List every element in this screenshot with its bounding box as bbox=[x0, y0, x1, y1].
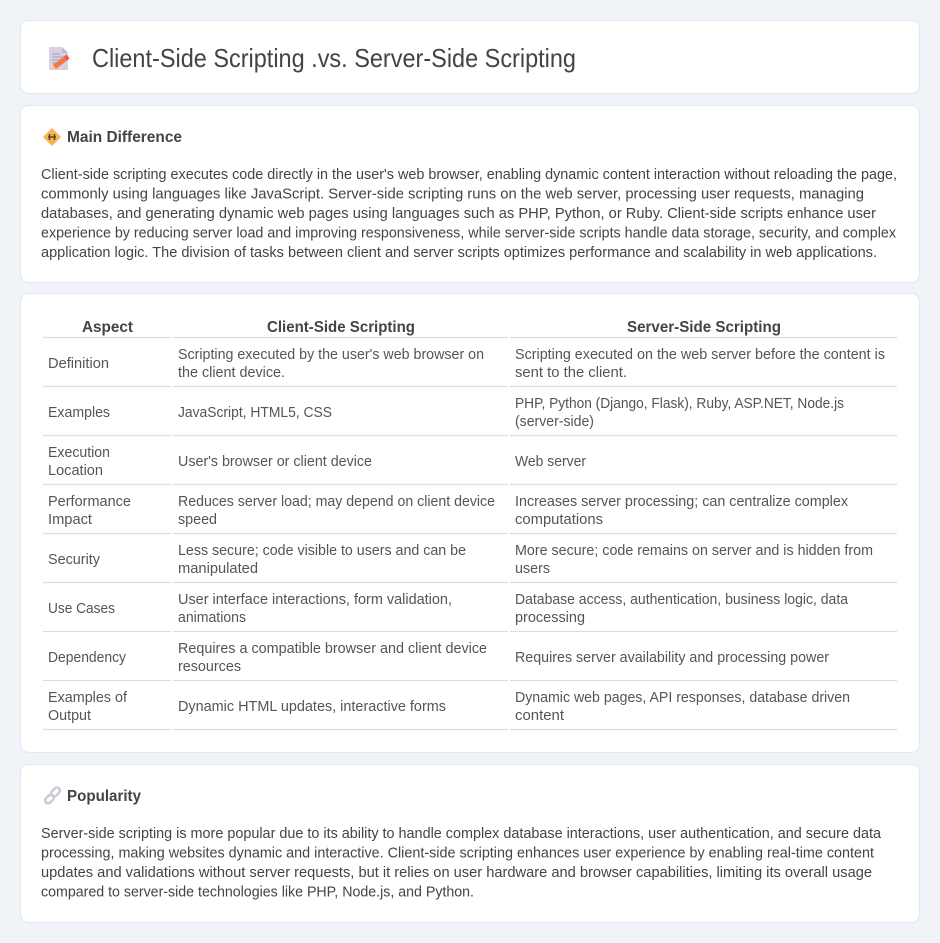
row: execution location: User's browser or client device bbox=[178, 454, 372, 470]
row: dependency: Dependency bbox=[48, 650, 127, 666]
row: use cases bbox=[48, 592, 848, 626]
heading: popularity: Popularity bbox=[67, 788, 141, 805]
row: use cases: Database access, authentication, business logic, data bbox=[515, 592, 848, 608]
text block: main difference: application logic. The division of tasks between client and server scripts optimizes performance and scalability in web applications. bbox=[41, 245, 877, 261]
row: dependency bbox=[48, 641, 829, 675]
row: definition bbox=[48, 347, 885, 381]
row: examples of output: Dynamic web pages, API responses, database driven bbox=[515, 690, 850, 706]
row: definition: sent to the client. bbox=[515, 365, 627, 381]
row: execution location: Web server bbox=[515, 454, 586, 470]
row: performance impact: Performance bbox=[48, 494, 131, 510]
icon: document with pencil bbox=[49, 47, 70, 70]
row: examples bbox=[48, 396, 844, 430]
text block: main difference: Client-side scripting executes code directly in the user's web browser, enabling dynamic content interaction without reloading the page, bbox=[41, 167, 897, 183]
row: use cases: processing bbox=[515, 610, 585, 626]
row: execution location bbox=[48, 445, 586, 479]
row: definition: Scripting executed by the user's web browser on bbox=[178, 347, 484, 363]
title: Client-Side Scripting .vs. Server-Side Scripting bbox=[92, 45, 576, 73]
row: use cases: User interface interactions, form validation, bbox=[178, 592, 452, 608]
table header bbox=[82, 319, 781, 336]
heading: main difference: Main Difference bbox=[67, 129, 182, 146]
row: performance impact: Impact bbox=[48, 512, 92, 528]
row: performance impact: Reduces server load; may depend on client device bbox=[178, 494, 495, 510]
row: definition: Scripting executed on the web server before the content is bbox=[515, 347, 885, 363]
text block: popularity: updates and validations without server requests, but it relies on user hardware and browser capabilities, limiting its overall usage bbox=[41, 865, 872, 881]
panel: popularity bbox=[20, 764, 920, 922]
panel: comparison table bbox=[20, 294, 920, 752]
table header: Aspect bbox=[82, 319, 134, 336]
row: examples of output: Output bbox=[48, 708, 91, 724]
row: examples: PHP, Python (Django, Flask), Ruby, ASP.NET, Node.js bbox=[515, 396, 844, 412]
row: dependency: Requires a compatible browser and client device bbox=[178, 641, 487, 657]
row: performance impact: computations bbox=[515, 512, 603, 528]
row: security bbox=[48, 543, 873, 577]
panel: header bbox=[20, 20, 920, 94]
row: examples of output: content bbox=[515, 708, 564, 724]
row: definition: the client device. bbox=[178, 365, 285, 381]
text block: main difference bbox=[41, 167, 897, 261]
row: performance impact: Increases server processing; can centralize complex bbox=[515, 494, 849, 510]
panel: main difference bbox=[20, 106, 920, 282]
row: security: users bbox=[515, 561, 550, 577]
row: examples of output: Examples of bbox=[48, 690, 128, 706]
icon: link bbox=[44, 786, 61, 805]
row: security: More secure; code remains on server and is hidden from bbox=[515, 543, 873, 559]
text block: popularity: Server-side scripting is more popular due to its ability to handle complex database interactions, user authentication, and secure data bbox=[41, 826, 881, 842]
row: examples: JavaScript, HTML5, CSS bbox=[178, 405, 332, 421]
text block: main difference: databases, and generating dynamic web pages using languages such as PHP, Python, or Ruby. Client-side scripts enhance user bbox=[41, 206, 876, 222]
row: execution location: Execution bbox=[48, 445, 110, 461]
text block: popularity bbox=[41, 826, 881, 900]
row: execution location: Location bbox=[48, 463, 103, 479]
text block: popularity: processing, making websites dynamic and interactive. Client-side scripting enhances user experience by enabling real-time content bbox=[41, 846, 874, 862]
text block: main difference: commonly using languages like JavaScript. Server-side scripting runs on the web server, processing user requests, managing bbox=[41, 186, 864, 202]
row: security: Security bbox=[48, 552, 101, 568]
row: use cases: animations bbox=[178, 610, 246, 626]
row: examples of output bbox=[48, 690, 850, 724]
row: examples: Examples bbox=[48, 405, 110, 421]
row: use cases: Use Cases bbox=[48, 601, 115, 617]
row: examples: (server-side) bbox=[515, 414, 594, 430]
row: security: Less secure; code visible to users and can be bbox=[178, 543, 466, 559]
row: examples of output: Dynamic HTML updates, interactive forms bbox=[178, 699, 446, 715]
icon: warning diamond bbox=[44, 129, 60, 145]
table header: Server-Side Scripting bbox=[627, 319, 781, 336]
row: security: manipulated bbox=[178, 561, 258, 577]
row: performance impact: speed bbox=[178, 512, 217, 528]
row: dependency: Requires server availability and processing power bbox=[515, 650, 829, 666]
table header: Client-Side Scripting bbox=[267, 319, 415, 336]
row: dependency: resources bbox=[178, 659, 241, 675]
row: definition: Definition bbox=[48, 356, 109, 372]
text block: popularity: compared to server-side technologies like PHP, Node.js, and Python. bbox=[41, 884, 474, 900]
row: performance impact bbox=[48, 494, 849, 528]
text block: main difference: experience by reducing server load and improving responsiveness, while server-side scripts handle data storage, security, and complex bbox=[41, 226, 897, 242]
table grid lines bbox=[43, 338, 897, 730]
